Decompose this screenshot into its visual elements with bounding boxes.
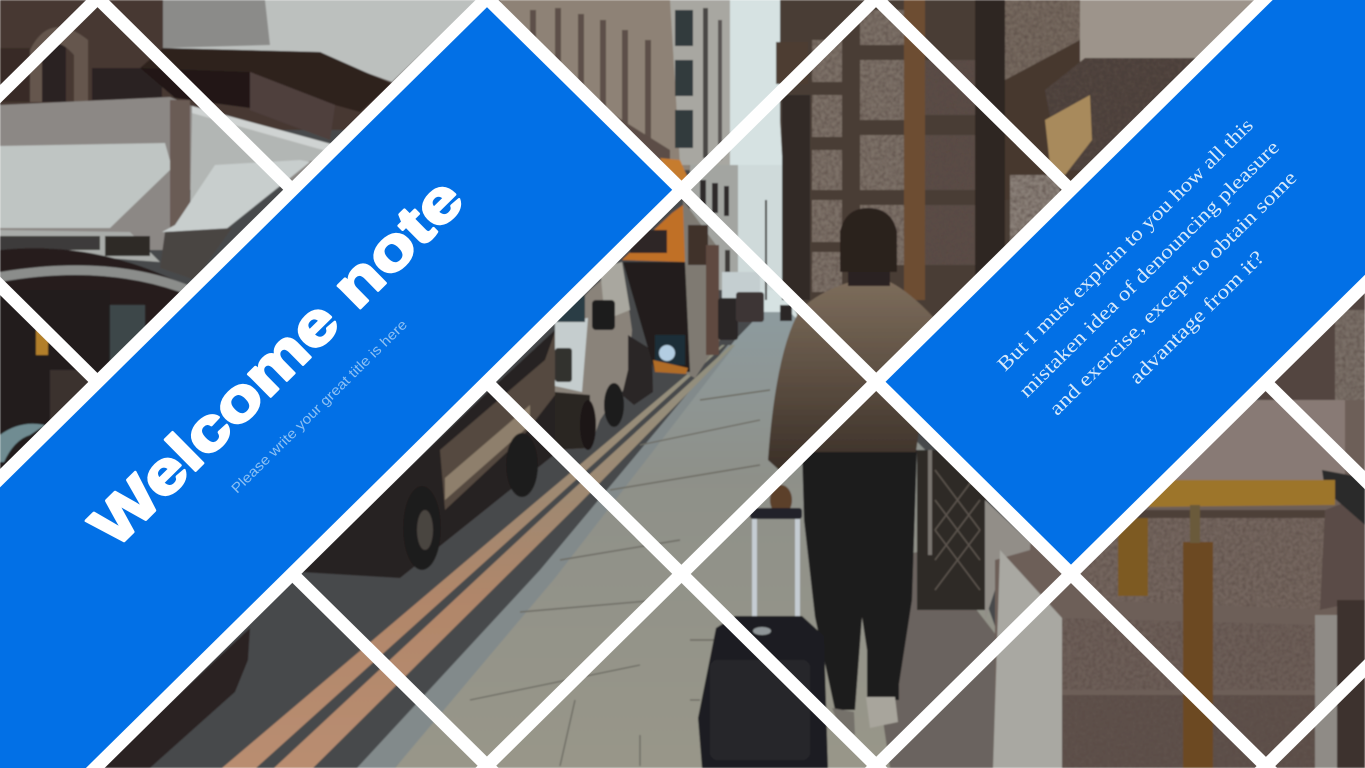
parked cars, left (0, 230, 190, 480)
dark road edge under car (100, 628, 250, 768)
beanie (840, 208, 897, 272)
panel: blue title band (0, 0, 682, 768)
trolley suitcase (698, 508, 828, 768)
neck and collar (848, 272, 890, 286)
darker sidewalk section, right of man (870, 550, 1000, 768)
shoes (866, 697, 898, 728)
paving joints (470, 390, 770, 766)
subtitle: Please write your great title is here (228, 316, 410, 496)
building: top-left facade (0, 0, 500, 130)
paragraph (991, 112, 1332, 450)
dark car behind van (622, 335, 653, 405)
upper right corner stonework (1005, 0, 1305, 245)
curb (357, 345, 735, 768)
double yellow lines (222, 345, 735, 768)
truck (0, 97, 335, 280)
stone plinth and steps, lower right (993, 400, 1365, 768)
white van (555, 262, 632, 450)
hand (770, 485, 792, 515)
red double-decker bus (622, 158, 720, 378)
legs (802, 450, 917, 710)
paragraph: and exercise, except to obtain some (1045, 167, 1301, 420)
panel: blue text band (876, 0, 1365, 574)
dark van with wheel, lower centre (300, 330, 560, 578)
sidewalk (395, 312, 1000, 768)
paragraph: advantage from it? (1125, 246, 1269, 389)
man walking (768, 208, 934, 735)
gold railing (1118, 480, 1335, 768)
jacket (768, 282, 934, 478)
paragraph: mistaken idea of denouncing pleasure (1015, 136, 1284, 402)
fence and pale wall (917, 450, 1060, 620)
distant facades and sky (500, 0, 800, 320)
heading: Welcome note: Welcome note (77, 165, 476, 559)
far right wall (1260, 290, 1365, 480)
distant cars and pedestrians (718, 272, 792, 340)
road surface (0, 330, 735, 768)
scaffolding tarp (140, 0, 478, 140)
paragraph: But I must explain to you how all this (993, 114, 1258, 376)
stone building right of street (776, 0, 1010, 330)
